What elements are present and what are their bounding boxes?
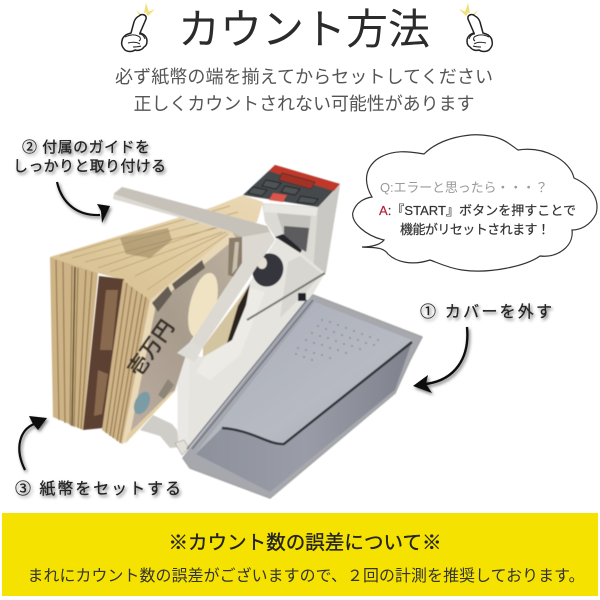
banknote front face xyxy=(122,232,243,444)
bubble answer text: A:『START』ボタンを押すことで xyxy=(379,203,576,218)
machine lower body xyxy=(177,238,325,449)
label: step 1: ① カバーを外す xyxy=(420,303,552,321)
banknote stack: dark note between xyxy=(83,276,124,430)
bubble answer text xyxy=(379,203,576,237)
banknote stack: left edge xyxy=(50,257,98,430)
notice body: まれにカウント数の誤差がございますので、２回の計測を推奨しております。 xyxy=(28,566,584,585)
icon: right pointing hand xyxy=(459,3,492,52)
machine upper body xyxy=(262,185,340,293)
speech bubble xyxy=(353,135,597,271)
arrow: step 1 xyxy=(413,327,467,393)
banknote stack: right edge xyxy=(102,280,150,444)
subtitle text xyxy=(115,67,493,114)
arrow: step 2 xyxy=(57,182,110,223)
bubble answer text: 機能がリセットされます！ xyxy=(400,222,550,237)
banknote stack: top surface xyxy=(50,195,263,300)
banknote front face: 壱万円 xyxy=(124,316,179,381)
guide arm xyxy=(113,187,275,362)
arrow: step 3 xyxy=(19,416,47,470)
notice heading: ※カウント数の誤差について※ xyxy=(168,532,442,554)
title: カウント方法 xyxy=(178,6,430,53)
control panel xyxy=(243,165,340,207)
transparent tray cover xyxy=(183,295,422,498)
bubble question text: Q:エラーと思ったら・・・？ xyxy=(380,180,548,195)
label: step 2 xyxy=(13,139,166,175)
label: step 3: ③ 紙幣をセットする xyxy=(15,480,181,498)
subtitle text: 必ず紙幣の端を揃えてからセットしてください xyxy=(115,67,493,87)
yellow notice panel xyxy=(2,513,598,596)
label: step 2: ② 付属のガイドを xyxy=(22,139,150,156)
machine base xyxy=(140,343,190,455)
label: step 2: しっかりと取り付ける xyxy=(13,158,166,175)
photo: bill counter with banknotes xyxy=(50,165,422,498)
icon: left pointing hand xyxy=(122,3,155,52)
subtitle text: 正しくカウントされない可能性があります xyxy=(134,94,474,114)
